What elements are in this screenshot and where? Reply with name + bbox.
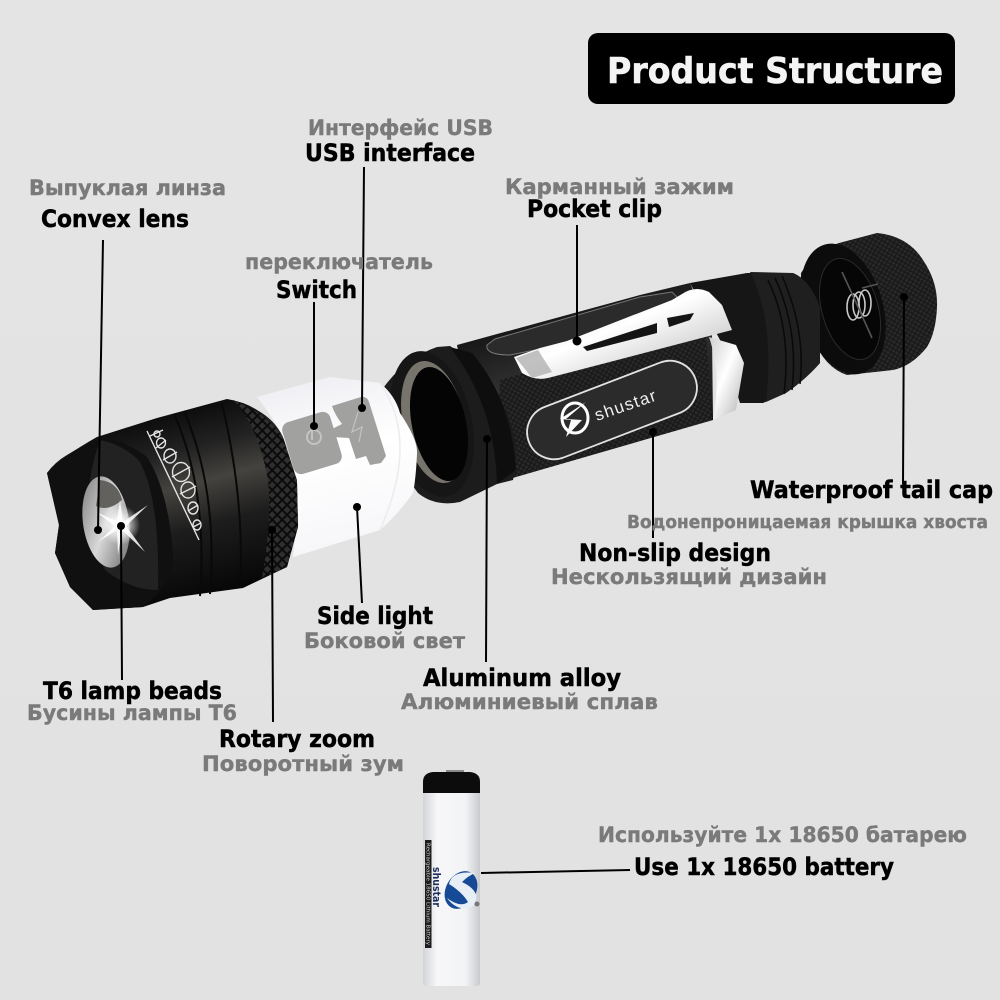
label: rotary zoom: Поворотный зум bbox=[202, 752, 404, 776]
label: side light: Side light bbox=[317, 602, 433, 630]
shustar logo plate: shustar bbox=[592, 386, 660, 425]
shustar logo plate bbox=[519, 353, 705, 467]
pointer: non-slip design bbox=[649, 428, 657, 538]
label: non-slip design: Non-slip design bbox=[579, 539, 771, 567]
label: T6 lamp beads: T6 lamp beads bbox=[43, 677, 222, 705]
label: aluminum alloy bbox=[401, 664, 658, 714]
label: waterproof tail cap: Водонепроницаемая крышка хвоста bbox=[627, 512, 988, 533]
label: non-slip design: Нескользящий дизайн bbox=[551, 565, 827, 589]
flashlight tail cap bbox=[786, 233, 937, 384]
battery label strip: Rechargeable 18650 Lithium Battery bbox=[424, 843, 430, 946]
pointer: USB interface bbox=[358, 167, 366, 412]
pocket clip bbox=[514, 289, 732, 379]
battery logo bbox=[438, 865, 484, 915]
label: T6 lamp beads bbox=[27, 677, 237, 725]
switch button bbox=[280, 410, 344, 476]
label: pocket clip: Pocket clip bbox=[527, 195, 662, 223]
engraved emblem bbox=[147, 430, 201, 540]
USB cover bbox=[332, 397, 386, 465]
pointer: pocket clip bbox=[572, 225, 582, 346]
pointer: switch bbox=[310, 302, 318, 430]
label: battery: Use 1x 18650 battery bbox=[634, 853, 894, 881]
T6 lamp sparkle bbox=[96, 500, 148, 555]
pointer: T6 lamp beads bbox=[117, 522, 125, 680]
knurled grip bbox=[233, 400, 298, 578]
battery bbox=[423, 770, 484, 986]
label: switch: переключатель bbox=[245, 250, 433, 274]
flashlight white side light section bbox=[257, 377, 417, 557]
label: switch: Switch bbox=[276, 276, 357, 304]
label: pocket clip bbox=[505, 175, 734, 223]
label: rotary zoom: Rotary zoom bbox=[219, 725, 375, 753]
label: USB interface bbox=[305, 116, 493, 167]
label: convex lens: Convex lens bbox=[41, 205, 189, 233]
pointer: side light bbox=[353, 503, 362, 603]
flashlight front ring bbox=[377, 343, 516, 505]
pointer: waterproof tail cap bbox=[900, 293, 908, 484]
upper label pill bbox=[487, 292, 680, 355]
label: side light bbox=[304, 602, 466, 653]
flashlight rear threaded section bbox=[690, 272, 820, 403]
label: pocket clip: Карманный зажим bbox=[505, 175, 734, 199]
pointer: rotary zoom bbox=[268, 526, 276, 722]
label: switch bbox=[245, 250, 433, 304]
title: Product Structure: Product Structure bbox=[607, 51, 943, 92]
label: aluminum alloy: Алюминиевый сплав bbox=[401, 690, 658, 714]
pointer: aluminum alloy bbox=[483, 435, 491, 662]
label: convex lens bbox=[29, 176, 226, 233]
label: convex lens: Выпуклая линза bbox=[29, 176, 226, 200]
label: USB interface: Интерфейс USB bbox=[308, 116, 493, 140]
silver clip band bbox=[709, 337, 744, 420]
front bezel bbox=[47, 437, 173, 610]
flashlight main tube bbox=[457, 283, 744, 483]
label: aluminum alloy: Aluminum alloy bbox=[423, 664, 621, 692]
label: rotary zoom bbox=[202, 725, 404, 776]
pointer: convex lens bbox=[94, 240, 103, 534]
label: side light: Боковой свет bbox=[304, 629, 466, 653]
label: T6 lamp beads: Бусины лампы Т6 bbox=[27, 701, 237, 725]
title: Product Structure bbox=[588, 33, 955, 104]
label: battery: Используйте 1х 18650 батарею bbox=[598, 823, 967, 847]
label: battery bbox=[598, 823, 967, 881]
logo mark bbox=[560, 402, 588, 437]
tail spring bbox=[842, 272, 878, 338]
label: non-slip design bbox=[551, 539, 827, 589]
flashlight head bbox=[47, 399, 298, 610]
line: battery pointer bbox=[481, 870, 630, 873]
battery brand text: shustar bbox=[430, 867, 443, 907]
label: USB interface: USB interface bbox=[305, 139, 475, 167]
label: waterproof tail cap bbox=[627, 476, 993, 533]
lens bbox=[77, 473, 135, 571]
